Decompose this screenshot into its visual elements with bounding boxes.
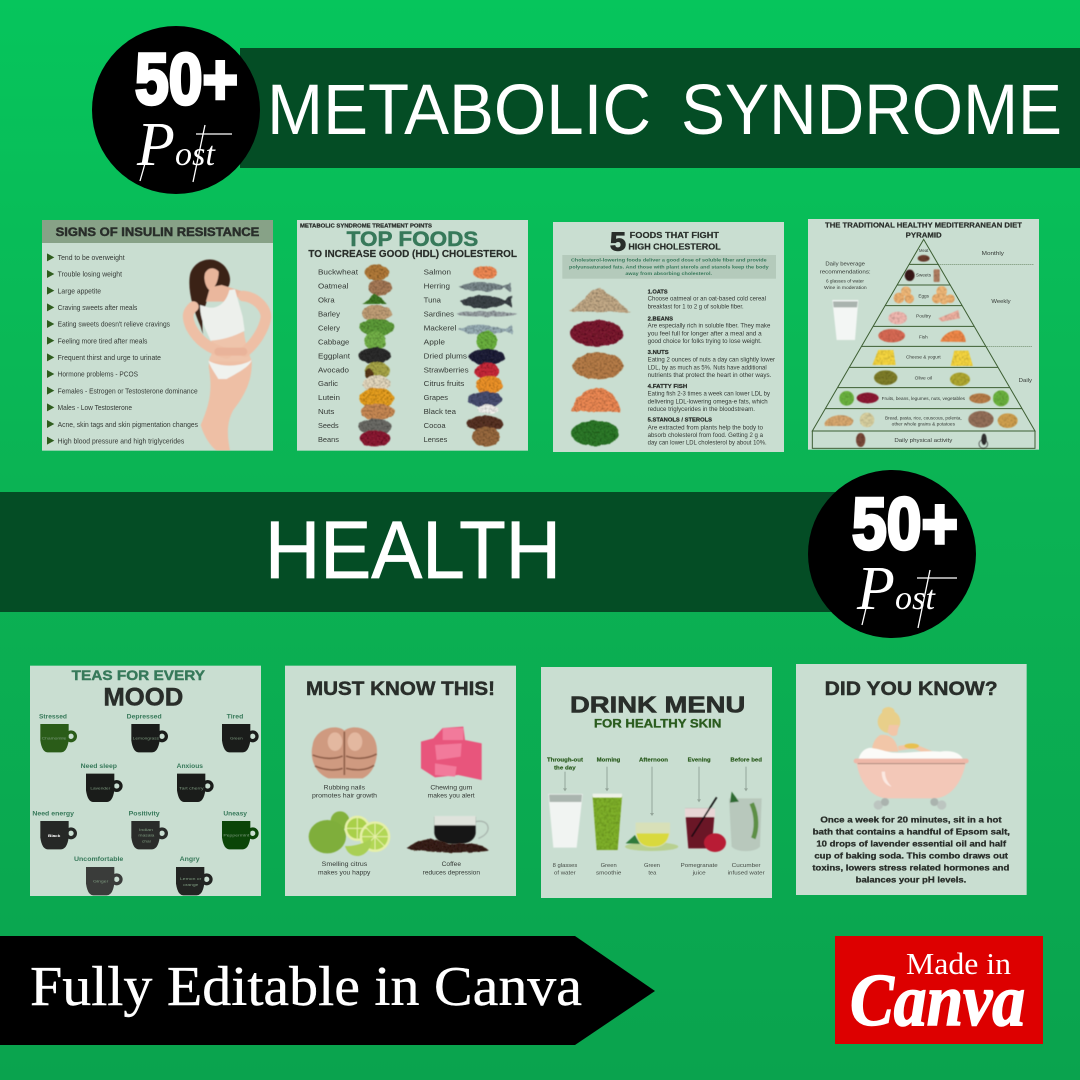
heading: signs of insulin resistance: SIGNS OF INSULIN RESISTANCE <box>56 226 260 239</box>
labels: pyramid tiers: Fish <box>919 334 928 339</box>
text: bath advice: toxins, lowers stress related hormones and <box>812 862 1009 872</box>
labels: tea names: Green <box>230 736 243 741</box>
icons: cholesterol foods <box>569 289 631 446</box>
text: drink captions: Pomegranate <box>681 863 718 869</box>
text: food explanations: nutrients that protect the heart in other ways. <box>648 372 772 379</box>
list: insulin resistance signs <box>47 253 198 446</box>
text: bath advice: 10 drops of lavender essential oil and half <box>816 838 1006 848</box>
heading: 5 foods that fight high cholesterol: FOODS THAT FIGHT <box>630 230 719 240</box>
list: insulin resistance signs: Craving sweets after meals <box>58 303 137 312</box>
text: must know captions: Coffee <box>442 861 461 868</box>
labels: times of day: the day <box>554 765 576 771</box>
panel: 5 foods that fight high cholesterol <box>553 222 784 452</box>
list: foods left column: Cabbage <box>318 337 349 346</box>
chart: pyramid structure <box>812 239 1035 448</box>
labels: tea names: Lavender <box>90 785 111 790</box>
labels: pyramid tiers: Olive oil <box>915 375 932 380</box>
list: insulin resistance signs: Females - Estrogen or Testosterone dominance <box>58 386 198 395</box>
figure: woman holding stomach <box>188 259 266 451</box>
text: food explanations: 2.BEANS <box>648 316 673 322</box>
heading: metabolic syndrome: METABOLIC <box>267 71 651 150</box>
text: drink captions: smoothie <box>596 871 621 877</box>
icon: rubbing nails fists <box>312 727 377 778</box>
heading: 5 foods that fight high cholesterol: HIGH CHOLESTEROL <box>628 241 721 251</box>
list: foods left column: Oatmeal <box>318 282 349 291</box>
text: food explanations: 4.FATTY FISH <box>648 384 687 390</box>
heading: fully editable in canva: Fully Editable in Canva <box>30 956 582 1018</box>
panel: signs of insulin resistance <box>42 220 273 451</box>
heading: 5 foods that fight high cholesterol <box>610 227 721 257</box>
icons: tea cups <box>40 724 259 895</box>
text: bath advice <box>812 814 1010 884</box>
text: food explanations: you feel full for longer after a meal and a <box>648 330 762 337</box>
text: food explanations: LDL, by as much as 5%. Nuts have additional <box>648 364 767 371</box>
labels: pyramid tiers: Sweets <box>916 273 931 278</box>
text: must know captions: Chewing gum <box>430 784 472 791</box>
heading: metabolic syndrome <box>267 71 1062 150</box>
list: insulin resistance signs: Hormone problems - PCOS <box>58 370 138 379</box>
list: foods right column: Herring <box>424 282 450 291</box>
list: foods right column: Strawberries <box>424 365 469 374</box>
labels: pyramid tiers: Poultry <box>916 314 932 319</box>
list: insulin resistance signs: Feeling more tired after meals <box>58 336 147 345</box>
text: drink captions: of water <box>554 871 576 877</box>
panel: did you know <box>796 664 1027 895</box>
heading: drink menu: DRINK MENU <box>570 691 745 717</box>
labels: tea names: Black <box>48 833 61 838</box>
labels: times of day: Afternoon <box>639 758 668 764</box>
labels: pyramid tiers: Bread, pasta, rice, couscous, polenta, <box>885 415 962 420</box>
labels: tea names: orange <box>183 882 199 887</box>
list: foods left column: Buckwheat <box>318 268 359 277</box>
labels: frequency: Monthly <box>982 251 1004 257</box>
text: must know captions: Smelling citrus <box>322 861 367 868</box>
text: food explanations <box>648 289 775 446</box>
heading: top foods: TOP FOODS <box>347 227 478 251</box>
text: beverage recommendations: 6 glasses of water <box>826 279 865 284</box>
panel: drink menu <box>541 667 772 898</box>
list: foods left column: Seeds <box>318 421 339 430</box>
list: foods left column: Avocado <box>318 365 349 374</box>
text: must know captions: makes you alert <box>428 793 475 800</box>
panel: mediterranean diet pyramid <box>808 219 1039 450</box>
heading: metabolic syndrome: SYNDROME <box>681 71 1062 150</box>
arrows: time to drink <box>563 767 748 816</box>
list: insulin resistance signs: Large appetite <box>58 286 101 295</box>
panel: teas for every mood <box>30 666 261 896</box>
list: foods left column: Okra <box>318 296 335 305</box>
list: foods left column: Lutein <box>318 393 340 402</box>
list: foods right column: Lenses <box>424 435 447 444</box>
intro text band: away from absorbing cholesterol. <box>625 271 713 277</box>
labels: pyramid tiers: Fruits, beans, legumes, nuts, vegetables <box>882 396 965 401</box>
intro text band: polyunsaturated fats. And those with plant sterols and stanols keep the body <box>569 264 769 270</box>
text: food explanations: absorb cholesterol from food. Getting 2 g a <box>648 432 764 439</box>
intro text band: Cholesterol-lowering foods deliver a good dose of soluble fiber and provide <box>571 258 767 264</box>
labels: moods: Need energy <box>32 810 75 817</box>
text: drink captions: infused water <box>728 871 765 877</box>
labels: tea names: chai <box>142 838 151 843</box>
list: foods left column: Eggplant <box>318 351 351 360</box>
text: beverage recommendations <box>820 262 871 290</box>
illustration: woman in bathtub <box>854 707 969 810</box>
text: food explanations: Eating fish 2-3 times a week can lower LDL by <box>648 391 771 398</box>
heading: 5 foods that fight high cholesterol: 5 <box>610 227 626 257</box>
list: foods right column: Cocoa <box>424 421 446 430</box>
heading: to increase good cholesterol: TO INCREASE GOOD (HDL) CHOLESTEROL <box>308 249 517 260</box>
icons: left food stack <box>358 265 395 446</box>
list: foods left column: Celery <box>318 323 340 332</box>
text: beverage recommendations: recommendations: <box>820 269 871 275</box>
list: foods right column <box>424 268 469 444</box>
badge: made in canva: Canva <box>850 960 1025 1042</box>
text: food explanations: day can lower LDL cholesterol by about 10%. <box>648 439 767 446</box>
icons: pyramid foods <box>824 255 1018 448</box>
list: insulin resistance signs: Frequent thirst and urge to urinate <box>58 353 161 362</box>
heading: mediterranean diet pyramid <box>825 223 1023 240</box>
list: foods right column: Tuna <box>424 296 442 305</box>
list: foods right column: Grapes <box>424 393 448 402</box>
list: foods right column: Citrus fruits <box>424 379 465 388</box>
text: bath advice: bath that contains a handful of Epsom salt, <box>813 826 1010 836</box>
badge: 50+ post top <box>92 26 260 194</box>
icon: coffee <box>407 816 488 853</box>
labels: moods: Stressed <box>39 713 67 720</box>
text: food explanations: Are especially rich in soluble fiber. They make <box>648 323 771 330</box>
heading: health: HEALTH <box>265 505 561 596</box>
heading: mediterranean diet pyramid: THE TRADITIONAL HEALTHY MEDITERRANEAN DIET <box>825 223 1023 230</box>
heading: mood: MOOD <box>103 684 183 711</box>
text: drink captions: juice <box>691 871 706 877</box>
labels: moods: Depressed <box>127 713 162 720</box>
list: foods right column: Salmon <box>424 268 451 277</box>
icon: water glass <box>832 300 858 340</box>
labels: pyramid tiers: Daily physical activity <box>894 438 953 444</box>
panel: must know this <box>285 666 516 896</box>
list: insulin resistance signs: Trouble losing weight <box>58 270 123 279</box>
text: drink captions <box>553 863 765 877</box>
list: insulin resistance signs: Males - Low Testosterone <box>58 403 132 412</box>
icons: right food stack <box>457 266 517 447</box>
text: food explanations: reduce triglycerides in the bloodstream. <box>648 406 755 413</box>
labels: pyramid tiers: Meat <box>919 248 929 253</box>
text: must know captions: promotes hair growth <box>312 793 378 800</box>
text: must know captions: makes you happy <box>318 869 371 876</box>
text: bath advice: cup of baking soda. This combo draws out <box>814 850 1008 860</box>
labels: times of day: Before bed <box>730 758 762 764</box>
text: food explanations: 5.STANOLS / STEROLS <box>648 418 712 424</box>
list: insulin resistance signs: High blood pressure and high triglycerides <box>58 437 184 446</box>
labels: moods: Uneasy <box>223 810 248 817</box>
text: food explanations: Eating 2 ounces of nuts a day can slightly lower <box>648 357 775 364</box>
list: insulin resistance signs: Eating sweets doesn't relieve cravings <box>58 320 170 329</box>
panel: top foods <box>297 220 528 451</box>
text: must know captions: Rubbing nails <box>324 784 365 791</box>
labels: frequency <box>982 251 1032 384</box>
banner: health <box>0 492 840 612</box>
list: foods left column: Barley <box>318 309 340 318</box>
text: drink captions: Green <box>644 863 660 869</box>
badge: 50+ post middle: 50+ <box>852 484 958 565</box>
labels: times of day <box>547 758 762 771</box>
labels: moods: Uncomfortable <box>74 856 124 863</box>
list: foods left column: Nuts <box>318 407 335 416</box>
labels: pyramid tiers: Eggs <box>918 293 929 298</box>
labels: pyramid tiers <box>882 248 965 444</box>
text: bath advice: balances your pH levels. <box>856 874 966 884</box>
badge: 50+ post middle <box>808 470 976 638</box>
labels: tea names: Indian <box>139 827 153 832</box>
text: drink captions: Cucumber <box>732 863 761 869</box>
heading: for healthy skin: FOR HEALTHY SKIN <box>594 717 721 731</box>
heading: must know this: MUST KNOW THIS! <box>306 679 495 700</box>
text: bath advice: Once a week for 20 minutes, sit in a hot <box>820 814 1002 824</box>
labels: times of day: Morning <box>597 758 620 764</box>
text: food explanations: 1.OATS <box>648 289 668 295</box>
labels: moods: Tired <box>227 713 243 720</box>
text: food explanations: delivering LDL-lowering omega-e fats, which <box>648 398 768 405</box>
badge: 50+ post middle: Post <box>856 555 937 623</box>
text: food explanations: breakfast for 1 to 2 g of soluble fiber. <box>648 303 744 310</box>
icons: drinks <box>548 792 762 852</box>
list: foods left column <box>318 268 359 444</box>
list: insulin resistance signs: Acne, skin tags and skin pigmentation changes <box>58 420 198 429</box>
text: food explanations: Are extracted from plants help the body to <box>648 424 764 431</box>
text: drink captions: tea <box>648 871 656 877</box>
badge: made in canva: Made in <box>906 946 1012 981</box>
labels: moods: Positivity <box>129 810 160 817</box>
list: foods right column: Mackerel <box>424 323 457 332</box>
labels: tea names: Lemon or <box>180 876 202 881</box>
labels: tea names: Tart cherry <box>179 785 204 790</box>
banner: fully editable in canva <box>0 936 655 1045</box>
text: food explanations: good choice for folks trying to lose weight. <box>648 338 762 345</box>
labels: moods: Angry <box>180 856 200 863</box>
labels: tea names: Chamomile <box>42 736 67 741</box>
labels: tea names: Ginger <box>93 878 109 883</box>
labels: moods: Need sleep <box>81 763 117 770</box>
icon: chewing gum <box>421 727 482 780</box>
labels: tea names: Peppermint <box>223 833 250 838</box>
labels: moods: Anxious <box>177 763 203 770</box>
labels: times of day: Evening <box>688 758 711 764</box>
labels: pyramid tiers: Cheese & yogurt <box>906 355 942 360</box>
badge: 50+ post top: 50+ <box>135 40 238 120</box>
list: foods right column: Sardines <box>424 309 454 318</box>
labels: tea names: masala <box>138 833 155 838</box>
heading: mediterranean diet pyramid: PYRAMID <box>906 233 942 240</box>
list: foods left column: Beans <box>318 435 339 444</box>
text: beverage recommendations: Daily beverage <box>825 262 865 268</box>
labels: frequency: Weekly <box>991 299 1011 305</box>
labels: times of day: Through-out <box>547 758 583 764</box>
list: foods right column: Apple <box>424 337 445 346</box>
heading: metabolic syndrome treatment points: METABOLIC SYNDROME TREATMENT POINTS <box>300 223 432 229</box>
list: foods left column: Garlic <box>318 379 338 388</box>
labels: tea names: Lemongrass <box>133 736 159 741</box>
banner: metabolic syndrome <box>240 48 1080 168</box>
text: beverage recommendations: Wine in moderation <box>824 285 867 290</box>
labels: frequency: Daily <box>1019 378 1032 384</box>
labels: tea names <box>42 736 250 887</box>
text: food explanations: 3.NUTS <box>648 350 669 356</box>
text: must know captions: reduces depression <box>423 869 480 876</box>
labels: moods <box>32 713 248 863</box>
text: drink captions: Green <box>601 863 617 869</box>
intro text band <box>562 255 776 279</box>
list: insulin resistance signs: Tend to be overweight <box>58 253 125 262</box>
text: must know captions <box>312 784 480 876</box>
badge: 50+ post top: Post <box>136 111 217 179</box>
icon: limes <box>309 811 390 856</box>
labels: pyramid tiers: other whole grains & potatoes <box>892 421 955 426</box>
list: foods right column: Black tea <box>424 407 457 416</box>
badge: made in canva <box>835 936 1043 1044</box>
list: foods right column: Dried plums <box>424 351 467 360</box>
heading: did you know: DID YOU KNOW? <box>825 679 998 700</box>
text: drink captions: 8 glasses <box>553 863 578 869</box>
heading: teas for every: TEAS FOR EVERY <box>72 668 205 683</box>
text: food explanations: Choose oatmeal or an oat-based cold cereal <box>648 296 766 303</box>
